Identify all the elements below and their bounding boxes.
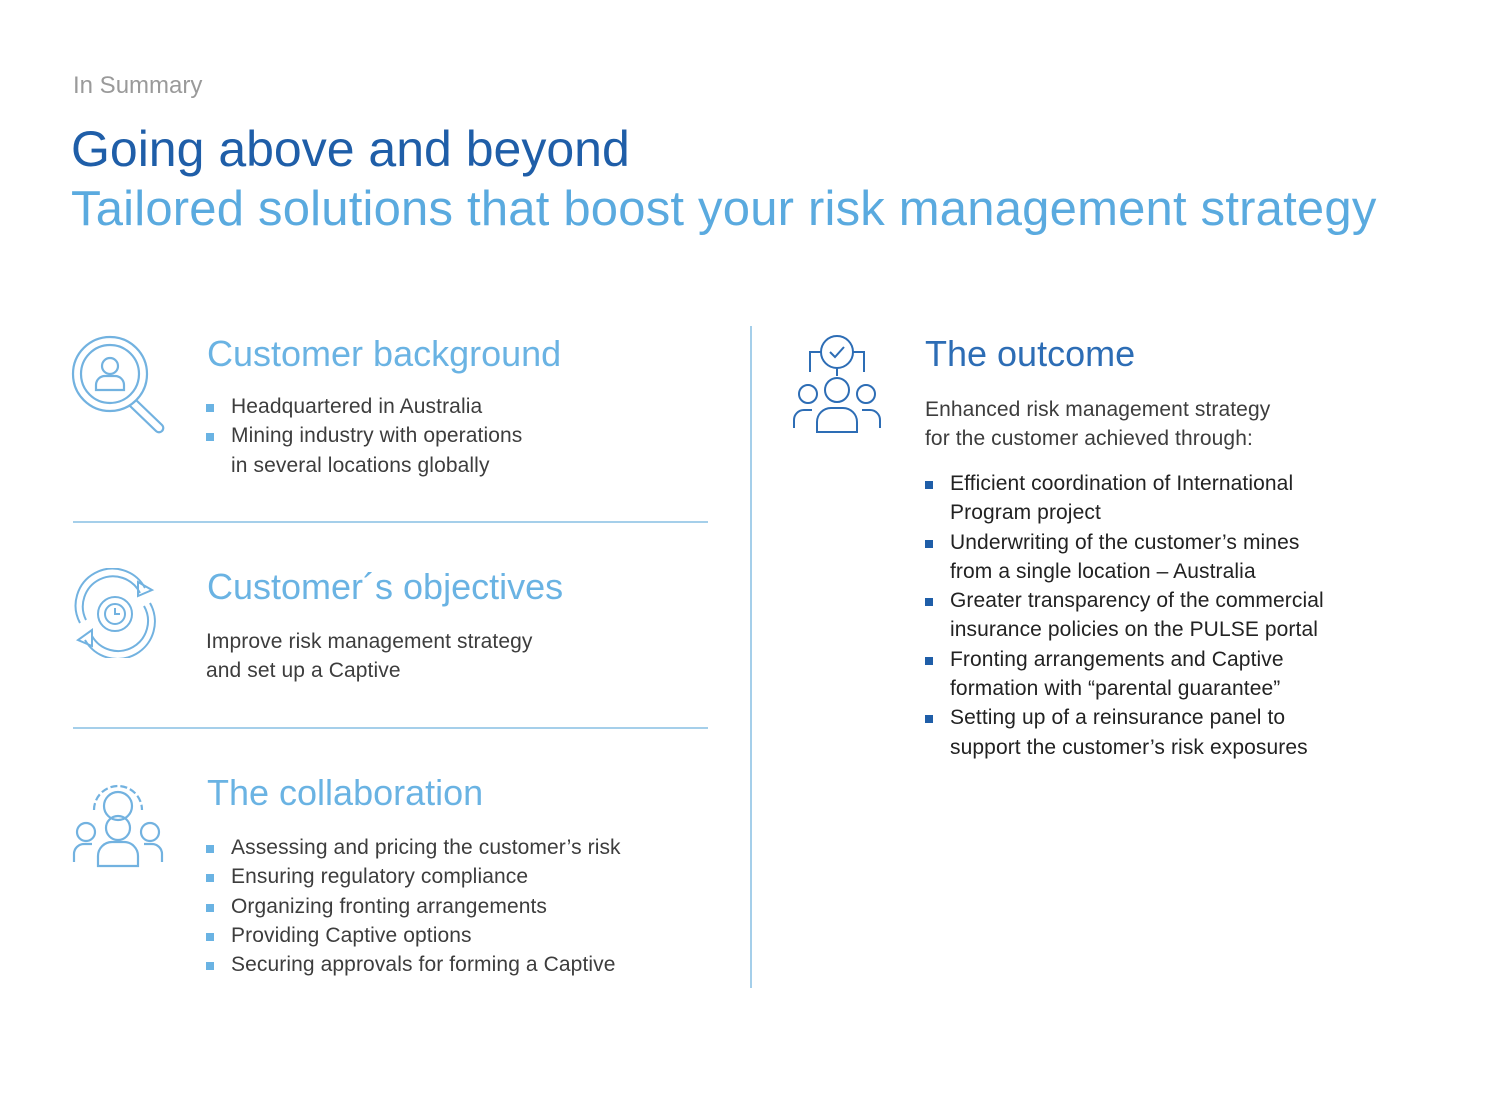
icon: team gear <box>72 784 164 868</box>
icon: gear cycle <box>74 568 156 658</box>
list: collaboration <box>206 836 621 976</box>
text: outcome intro: for the customer achieved through: <box>925 427 1253 450</box>
heading: objectives: Customer´s objectives <box>207 566 563 607</box>
title: Going above and beyond <box>71 121 630 177</box>
list: collaboration: Organizing fronting arrangements <box>231 895 547 918</box>
heading: collaboration: The collaboration <box>207 772 483 813</box>
list: outcome: insurance policies on the PULSE portal <box>950 618 1318 641</box>
list: outcome: support the customer’s risk exposures <box>950 736 1308 759</box>
text: objectives: Improve risk management strategy <box>206 630 532 653</box>
list: collaboration: Providing Captive options <box>231 924 472 947</box>
list: collaboration: Securing approvals for forming a Captive <box>231 953 616 976</box>
heading: customer background: Customer background <box>207 333 561 374</box>
list: collaboration: Ensuring regulatory compliance <box>231 865 528 888</box>
subtitle: Tailored solutions that boost your risk management strategy <box>71 182 1377 236</box>
icon: magnifier person <box>72 336 164 434</box>
list: outcome: Greater transparency of the commercial <box>950 589 1324 612</box>
list: outcome: from a single location – Australia <box>950 560 1256 583</box>
list: background <box>206 395 522 477</box>
list: outcome: Program project <box>950 501 1101 524</box>
list: outcome: Efficient coordination of International <box>950 472 1293 495</box>
list: outcome <box>925 472 1324 759</box>
icon: outcome team <box>793 335 881 433</box>
text: outcome intro <box>925 398 1270 450</box>
list: collaboration: Assessing and pricing the customer’s risk <box>231 836 621 859</box>
list: background: Headquartered in Australia <box>231 395 482 418</box>
list: outcome: formation with “parental guarantee” <box>950 677 1280 700</box>
dividers <box>73 521 708 523</box>
list: background: in several locations globally <box>231 454 490 477</box>
list: outcome: Fronting arrangements and Captive <box>950 648 1284 671</box>
text: objectives <box>206 630 532 682</box>
text: outcome intro: Enhanced risk management strategy <box>925 398 1270 421</box>
heading: outcome: The outcome <box>925 333 1135 374</box>
eyebrow: In Summary <box>73 72 202 99</box>
list: outcome: Underwriting of the customer’s mines <box>950 531 1299 554</box>
list: outcome: Setting up of a reinsurance panel to <box>950 706 1285 729</box>
text: objectives: and set up a Captive <box>206 659 401 682</box>
list: background: Mining industry with operations <box>231 424 522 447</box>
